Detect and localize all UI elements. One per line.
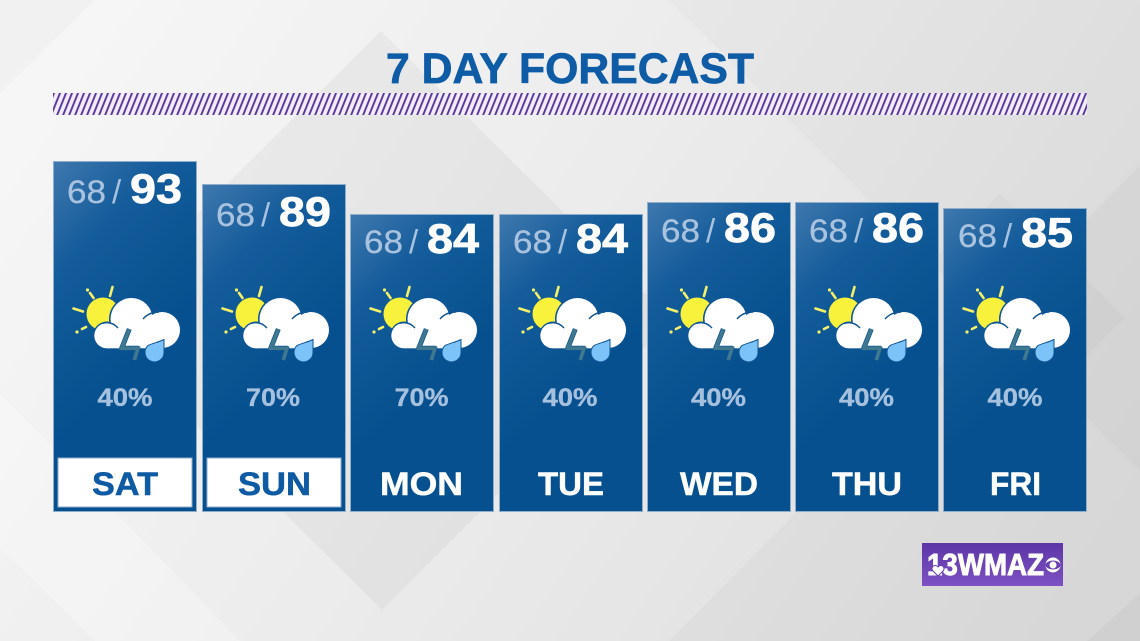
day label: WED	[680, 466, 758, 502]
icon: sun and storm cloud	[74, 287, 181, 362]
precipitation chance: 40%	[98, 384, 152, 412]
icon: sun and storm cloud	[668, 287, 775, 362]
slash: /	[854, 212, 864, 249]
precipitation chance: 40%	[691, 384, 746, 412]
icon: sun and storm cloud	[370, 287, 478, 362]
precipitation chance: 70%	[246, 384, 300, 412]
slash: /	[112, 173, 122, 210]
panel: SAT	[54, 162, 196, 512]
panel: SUN	[202, 184, 346, 512]
panel: THU	[796, 202, 938, 512]
day label: MON	[380, 466, 463, 502]
panel: FRI	[944, 208, 1086, 512]
low temperature: 68	[513, 224, 552, 260]
high temperature: 85	[1021, 209, 1073, 256]
icon: CBS eye	[1046, 558, 1060, 572]
precipitation chance: 40%	[542, 384, 598, 412]
slash: /	[261, 196, 271, 233]
day label: FRI	[990, 466, 1041, 502]
day label: SUN	[238, 466, 311, 502]
striped divider	[53, 93, 1087, 115]
icon: sun and storm cloud	[222, 287, 330, 362]
day label: SAT	[92, 466, 158, 502]
icon: sun and storm cloud	[964, 287, 1071, 362]
high temperature: 84	[576, 215, 629, 262]
low temperature: 68	[958, 218, 997, 254]
day label: TUE	[538, 466, 604, 502]
icon: sun and storm cloud	[520, 287, 627, 362]
precipitation chance: 40%	[839, 384, 894, 412]
high temperature: 89	[279, 188, 331, 235]
title: 7 DAY FORECAST	[386, 45, 754, 93]
panel: MON	[350, 214, 494, 512]
icon: sun and storm cloud	[816, 287, 923, 362]
precipitation chance: 70%	[394, 384, 448, 412]
low temperature: 68	[67, 174, 106, 210]
high temperature: 86	[724, 204, 776, 251]
logo wordmark: 13WMAZ	[927, 547, 1044, 582]
slash: /	[409, 223, 419, 260]
low temperature: 68	[364, 224, 403, 260]
day label box	[58, 458, 192, 507]
high temperature: 84	[427, 215, 480, 262]
day label: THU	[832, 466, 902, 502]
low temperature: 68	[809, 213, 848, 249]
slash: /	[1003, 217, 1013, 254]
high temperature: 93	[130, 165, 182, 212]
panel: WED	[648, 202, 790, 512]
high temperature: 86	[872, 204, 924, 251]
slash: /	[558, 223, 568, 260]
low temperature: 68	[216, 197, 255, 233]
day label box	[207, 458, 341, 507]
icon: heart	[932, 565, 944, 576]
station logo	[922, 543, 1063, 586]
low temperature: 68	[661, 213, 700, 249]
precipitation chance: 40%	[988, 384, 1042, 412]
panel: TUE	[500, 214, 642, 512]
slash: /	[706, 212, 716, 249]
